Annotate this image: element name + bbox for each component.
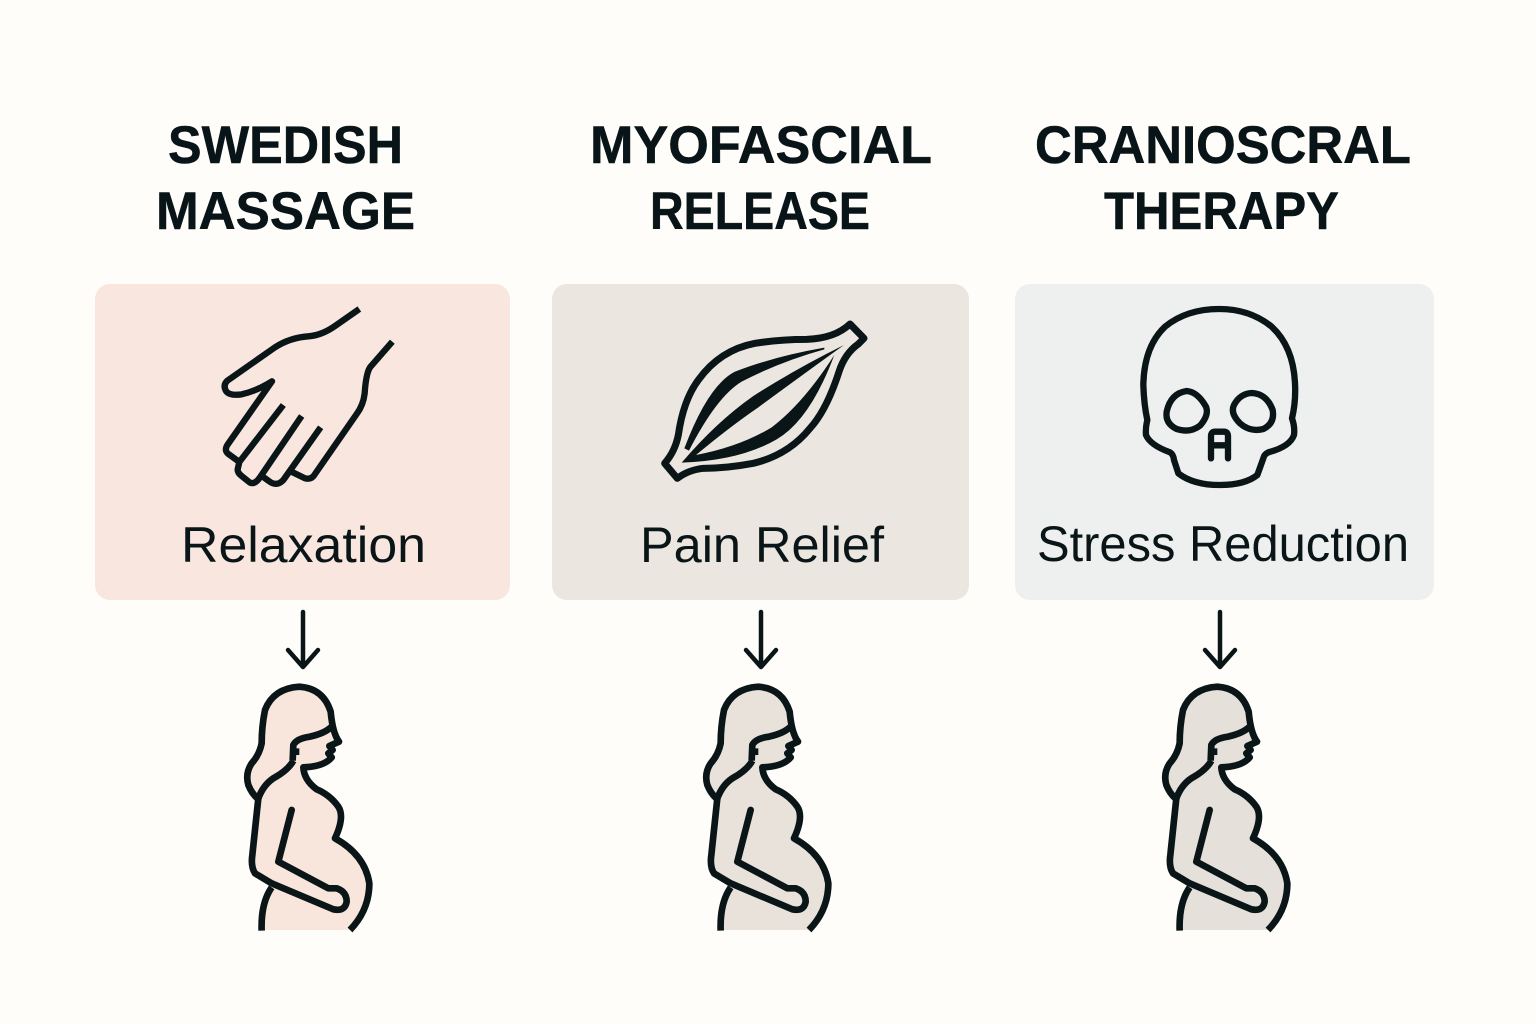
- figure: pregnant woman, pink: [247, 687, 369, 931]
- arrow: pain relief to figure: [746, 612, 776, 667]
- heading: Craniosacral Therapy: THERAPY: [1104, 182, 1339, 241]
- panel: stress reduction: [1015, 284, 1434, 600]
- heading: Myofascial Release: [590, 116, 932, 241]
- icon: muscle: [665, 324, 864, 478]
- icon: hand: [225, 309, 392, 484]
- heading: Myofascial Release: RELEASE: [650, 182, 870, 241]
- heading: Swedish Massage: SWEDISH: [168, 116, 403, 175]
- tapered fibres: [684, 348, 824, 451]
- label: Stress Reduction: Stress Reduction: [1037, 516, 1409, 572]
- heading: Swedish Massage: MASSAGE: [156, 182, 415, 241]
- label: Relaxation: Relaxation: [181, 517, 426, 573]
- figure: pregnant woman, grey: [1165, 687, 1287, 931]
- arrow: relaxation to figure: [288, 612, 318, 667]
- icon: skull: [1143, 309, 1295, 485]
- figure: pregnant woman, beige: [706, 687, 828, 931]
- label: Pain Relief: Pain Relief: [640, 517, 884, 573]
- heading: Myofascial Release: MYOFASCIAL: [590, 116, 932, 175]
- arrow: stress reduction to figure: [1205, 612, 1235, 667]
- heading: Craniosacral Therapy: [1035, 116, 1411, 241]
- heading: Swedish Massage: [156, 116, 415, 241]
- panel: relaxation: [95, 284, 510, 600]
- panel: pain relief: [552, 284, 969, 600]
- heading: Craniosacral Therapy: CRANIOSCRAL: [1035, 116, 1411, 175]
